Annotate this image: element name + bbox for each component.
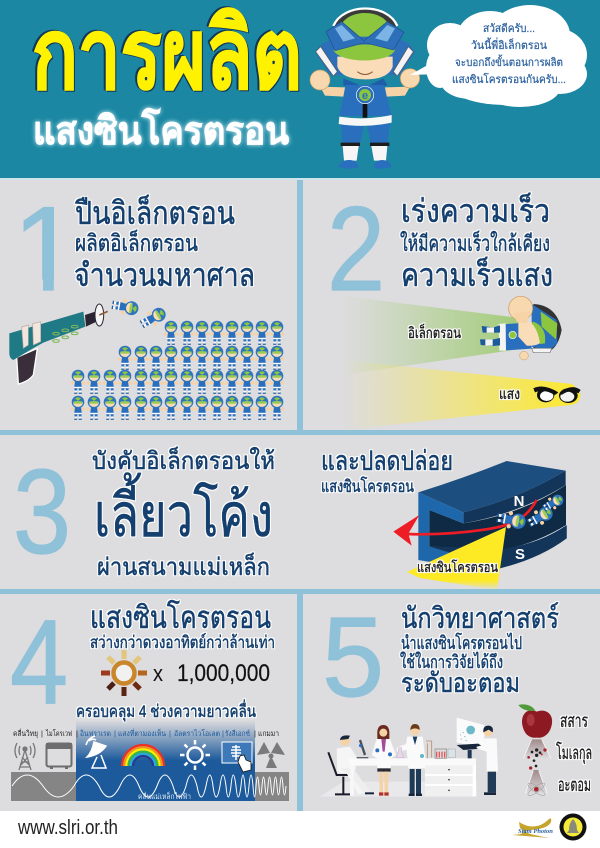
panel 4 xyxy=(10,594,289,801)
heading 5: นำแสงซินโครตรอนไป xyxy=(401,632,522,653)
panel 2 xyxy=(327,181,581,430)
panel 5 xyxy=(17,593,592,840)
heading 2 xyxy=(400,192,553,293)
header band xyxy=(0,0,600,180)
magnet pole S: S xyxy=(515,546,525,563)
heading 3 xyxy=(92,446,275,581)
logo: SLRI seal xyxy=(560,814,586,840)
illustration: laboratory xyxy=(320,718,498,797)
footer website: www.slri.or.th xyxy=(17,817,118,839)
multiplier x: x xyxy=(153,661,163,686)
spectrum labels: อัลตราไวโอเลต xyxy=(174,729,220,738)
heading 5: ระดับอะตอม xyxy=(401,668,520,698)
label: synchrotron light: แสงซินโครตรอน xyxy=(417,559,498,575)
icon: sun xyxy=(101,650,147,696)
icon: apple xyxy=(518,704,552,738)
matter diagram xyxy=(523,739,551,798)
speech bubble xyxy=(410,5,587,107)
electron crowd xyxy=(71,321,284,420)
title: แสงซินโครตรอน xyxy=(33,108,289,153)
icon: rainbow xyxy=(122,745,164,766)
mascot: e xyxy=(362,90,368,102)
spectrum labels: | xyxy=(114,729,116,738)
subheading right: และปลดปล่อย xyxy=(321,446,453,476)
title xyxy=(32,0,302,153)
icon: electron gun xyxy=(9,304,108,384)
subheading right: แสงซินโครตรอน xyxy=(321,476,414,496)
label: light: แสง xyxy=(499,386,520,403)
heading 5: ใช้ในการวิจัยได้ถึง xyxy=(400,651,503,672)
spectrum labels: | xyxy=(222,729,224,738)
icon: microwave xyxy=(46,743,72,769)
electron beam xyxy=(343,296,520,375)
heading 3: บังคับอิเล็กตรอนให้ xyxy=(92,446,275,475)
icon: x-ray monitor xyxy=(222,742,252,772)
speech bubble: วันนี้พี่อิเล็กตรอน xyxy=(471,37,547,52)
panel 1 xyxy=(9,182,284,420)
panel dividers xyxy=(0,180,600,811)
panel 3 xyxy=(13,444,567,590)
title: การผลิต xyxy=(32,0,302,109)
icon: uv sun xyxy=(180,740,210,770)
spectrum labels: แสงที่ตามองเห็น xyxy=(118,728,166,738)
heading 1: จำนวนมหาศาล xyxy=(74,257,255,293)
light cone xyxy=(407,527,506,590)
number 2: 2 xyxy=(327,181,385,316)
heading 1 xyxy=(74,194,255,293)
spectrum labels: | xyxy=(254,729,256,738)
woman scientist xyxy=(372,725,396,796)
spectrum labels: | xyxy=(76,729,78,738)
light beam xyxy=(343,360,580,430)
spectrum heading: ครอบคลุม 4 ช่วงความยาวคลื่น xyxy=(76,699,256,722)
magnet pole N: N xyxy=(514,493,524,510)
label: electron: อิเล็กตรอน xyxy=(408,323,461,342)
man scientist xyxy=(397,724,425,796)
heading 4: สว่างกว่าดวงอาทิตย์กว่าล้านเท่า xyxy=(90,633,275,652)
table xyxy=(349,758,476,796)
flasks and tubes xyxy=(396,741,455,758)
number 4: 4 xyxy=(10,594,68,729)
spectrum labels: รังสีเอกซ์ xyxy=(225,729,250,738)
computer and scientist xyxy=(457,718,498,795)
heading 1: ผลิตอิเล็กตรอน xyxy=(75,228,198,256)
band caption: คลื่นแม่เหล็กไฟฟ้า xyxy=(138,791,191,801)
spectrum labels: อินฟราเรด xyxy=(80,729,111,738)
speech bubble: จะบอกถึงขั้นตอนการผลิต xyxy=(455,54,563,69)
subheading right xyxy=(321,446,453,496)
speech bubble: สวัสดีครับ... xyxy=(483,22,535,35)
heading 2: เร่งความเร็ว xyxy=(401,192,550,229)
spectrum labels: | xyxy=(169,729,171,738)
heading 1: ปืนอิเล็กตรอน xyxy=(74,194,235,231)
spectrum labels xyxy=(13,728,279,738)
spectrum labels: | xyxy=(41,729,43,738)
number 1: 1 xyxy=(13,182,79,316)
red arrow xyxy=(393,500,537,546)
logo: Siam Photon: Siam Photon xyxy=(518,828,553,835)
number 3: 3 xyxy=(13,444,71,579)
heading 2: ความเร็วแสง xyxy=(401,256,553,293)
spectrum labels: คลื่นวิทยุ xyxy=(13,728,38,738)
icon: eyes xyxy=(533,387,581,403)
spectrum band xyxy=(11,720,289,801)
multiplier value: 1,000,000 xyxy=(177,660,270,687)
spectrum labels: ไมโครเวฟ xyxy=(45,729,72,738)
heading 3: เลี้ยวโค้ง xyxy=(94,472,273,549)
flying electron mascot xyxy=(480,296,562,360)
number 5: 5 xyxy=(322,593,384,720)
speech bubble: แสงซินโครตรอนกันครับ... xyxy=(452,72,566,86)
heading 3: ผ่านสนามแม่เหล็ก xyxy=(97,552,270,581)
mascot xyxy=(310,8,420,169)
icon: radiation xyxy=(257,742,285,768)
heading 4: แสงซินโครตรอน xyxy=(90,600,271,635)
spectrum labels: แกมมา xyxy=(258,729,279,738)
seated scientist xyxy=(328,735,374,794)
logo: Siam Photon xyxy=(512,818,553,838)
flying electrons xyxy=(111,297,169,331)
panels background xyxy=(0,180,600,811)
icon: radio tower xyxy=(15,743,35,770)
electrons in magnet xyxy=(496,492,566,531)
heading 4 xyxy=(90,600,275,652)
heading 5: นักวิทยาศาสตร์ xyxy=(401,602,559,635)
magnet xyxy=(418,461,567,568)
icon: satellite dish xyxy=(86,736,106,768)
heading 5 xyxy=(400,602,559,698)
